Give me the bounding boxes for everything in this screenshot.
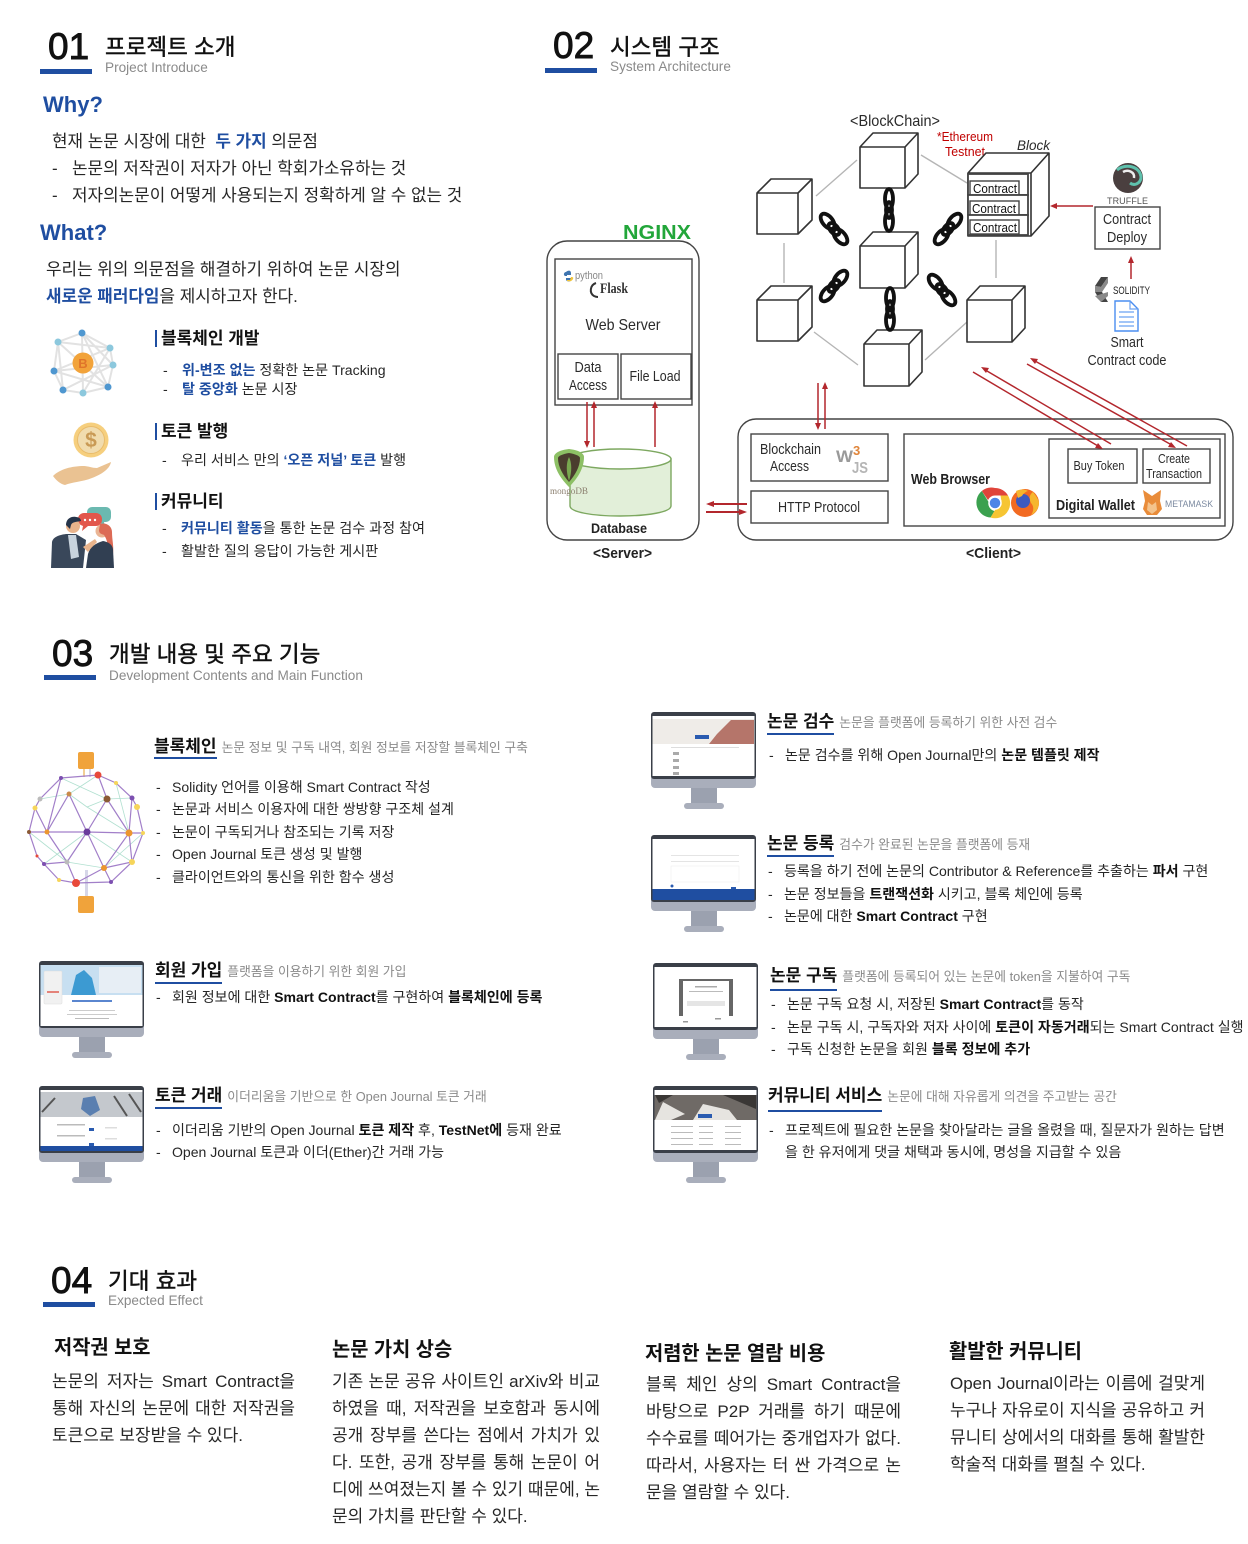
chart: system architecture diagram (546, 113, 1234, 562)
list: blockchain: Solidity 언어를 이용해 Smart Contract 작성 (172, 778, 431, 794)
digital wallet box: Create (1158, 452, 1190, 466)
heading: paper value increase: 논문 가치 상승 (332, 1338, 452, 1360)
text: low reading cost: 수수료를 떼어가는 중개업자가 없다. (646, 1428, 901, 1448)
digital wallet box: Transaction (1146, 467, 1202, 481)
text: low reading cost: 블록 체인 상의 Smart Contract을 (646, 1374, 901, 1394)
subheading: expected effect: Expected Effect (108, 1293, 203, 1308)
text: copyright protection (52, 1368, 295, 1448)
text: blockchain development points: 위-변조 없는 정확한 논문 Tracking (182, 362, 386, 378)
heading: blockchain (154, 737, 528, 759)
heading: paper review (767, 712, 1057, 735)
icon: coin in hand: $ (85, 429, 97, 452)
arrow: solidity to deploy (1128, 256, 1134, 279)
subheading: project introduce: Project Introduce (105, 60, 208, 75)
icon: blockchain network (50, 330, 116, 396)
list: blockchain: Open Journal 토큰 생성 및 발행 (172, 846, 362, 862)
list: blockchain (156, 778, 454, 884)
list: paper subscription: 논문 구독 요청 시, 저장된 Smart Contract를 동작 (787, 996, 1084, 1012)
database: mongoDB (550, 486, 588, 496)
list: paper review: - (769, 746, 774, 762)
label: smart contract code: Contract code (1088, 353, 1166, 369)
list: blockchain: 클라이언트와의 통신을 위한 함수 생성 (172, 868, 394, 884)
heading: expected effect: 기대 효과 (108, 1268, 197, 1294)
list: paper registration: - (768, 908, 773, 924)
list: token exchange: Open Journal 토큰과 이더(Ether)간 거래 가능 (172, 1144, 444, 1160)
blockchain access box: JS (852, 460, 868, 477)
heading: community service: 논문에 대해 자유롭게 의견을 주고받는 공간 (887, 1089, 1117, 1104)
heading: system architecture: 시스템 구조 (610, 34, 720, 60)
list: paper registration (768, 863, 1208, 924)
list: token exchange: - (156, 1122, 161, 1138)
text: active community: Open Journal이라는 이름에 걸맞게 (950, 1374, 1205, 1392)
list: blockchain: 논문이 구독되거나 참조되는 기록 저장 (172, 824, 394, 840)
list: blockchain: - (156, 824, 161, 840)
label: smart contract code (1088, 335, 1166, 369)
subheading: system architecture: System Architecture (610, 59, 731, 74)
sub-heading: blockchain development: 블록체인 개발 (161, 329, 260, 348)
heading: token exchange: 토큰 거래 (155, 1086, 222, 1105)
text: blockchain development points (163, 362, 386, 396)
text: paper value increase (332, 1368, 600, 1530)
list: community service: - (769, 1122, 774, 1138)
web server box: Access (569, 378, 607, 394)
text: low reading cost: 바탕으로 P2P 거래를 하기 때문에 (646, 1402, 901, 1420)
list: token exchange: - (156, 1144, 161, 1160)
label: client: <Client> (966, 545, 1021, 562)
list: paper subscription (771, 996, 1244, 1057)
text: active community: 학술적 대화를 펼칠 수 있다. (950, 1454, 1146, 1474)
icon: blockchain network: B (78, 356, 88, 371)
column: paper value increase (332, 1338, 600, 1532)
icon: truffle: TRUFFLE (1107, 196, 1148, 206)
text: paper value increase: 디에 쓰여졌는지 볼 수 있기 때문에, 논 (332, 1480, 600, 1498)
arrows: transaction and blockchain (1027, 358, 1187, 448)
list: blockchain: - (156, 778, 161, 794)
heading: member signup: 플랫폼을 이용하기 위한 회원 가입 (227, 964, 406, 978)
text: active community: 누구나 자유로이 지식을 공유하고 커 (950, 1400, 1205, 1420)
text: active community (950, 1370, 1205, 1478)
blockchain access box: Blockchain (760, 442, 821, 458)
heading: token exchange (155, 1086, 487, 1109)
icon: solidity: SOLIDITY (1113, 285, 1150, 297)
section number 04: 04 (51, 1260, 92, 1301)
list: community service: 을 한 유저에게 댓글 채택과 동시에, 명성을 지급할 수 있음 (785, 1144, 1121, 1160)
section number 03: 03 (52, 633, 93, 674)
list: paper registration: 논문 정보들을 트랜잭션화 시키고, 블록 체인에 등록 (784, 886, 1083, 902)
web server box: python (575, 270, 603, 282)
section bar 01 (40, 69, 92, 74)
list: paper registration: 등록을 하기 전에 논문의 Contributor & Reference를 추출하는 파서 구현 (784, 863, 1208, 879)
icon: coin in hand (53, 422, 111, 485)
text: blockchain development points: 탈 중앙화 논문 시장 (182, 380, 297, 396)
text: community points: 활발한 질의 응답이 가능한 게시판 (181, 543, 378, 559)
text: what paragraph (46, 260, 400, 306)
arrows: web server and database (584, 401, 658, 448)
text: copyright protection: 논문의 저자는 Smart Contract을 (52, 1372, 295, 1390)
blockchain network: Block (1017, 137, 1051, 153)
arrows: buy token and blockchain (973, 367, 1111, 449)
http protocol box: HTTP Protocol (778, 500, 860, 516)
text: active community: 뮤니티 상에서의 대화를 통해 활발한 (950, 1428, 1205, 1446)
list: paper registration: 논문에 대한 Smart Contract 구현 (784, 908, 988, 924)
list: member signup: 회원 정보에 대한 Smart Contract를 구현하여 블록체인에 등록 (172, 988, 542, 1004)
sub-heading: community: 커뮤니티 (161, 492, 224, 511)
web server box: Data (574, 360, 602, 376)
digital wallet box: Buy Token (1074, 459, 1125, 473)
list: paper subscription: 구독 신청한 논문을 회원 블록 정보에 추가 (787, 1041, 1030, 1057)
icon: solidity (1095, 277, 1150, 302)
heading: blockchain: 논문 정보 및 구독 내역, 회원 정보를 저장할 블록체인 구축 (222, 740, 528, 755)
text: low reading cost: 문을 열람할 수 있다. (646, 1482, 790, 1502)
panel: 04 expected effect (0, 1260, 1248, 1540)
text: why point 1: 논문의 저작권이 저자가 아닌 학회가소유하는 것 (72, 159, 406, 178)
heading: paper review: 논문을 플랫폼에 등록하기 위한 사전 검수 (839, 715, 1057, 730)
text: blockchain development points: - (163, 362, 168, 378)
digital wallet box: Digital Wallet (1056, 498, 1135, 514)
panel: 02 system architecture (545, 25, 1234, 562)
monitor: signup screen (39, 961, 144, 1058)
list: paper subscription: 논문 구독 시, 구독자와 저자 사이에 토큰이 자동거래되는 Smart Contract 실행 (787, 1018, 1244, 1034)
block with contracts: Contract (973, 181, 1017, 196)
heading: community service: 커뮤니티 서비스 (768, 1086, 882, 1105)
text: community points: - (162, 543, 167, 559)
blockchain access box: Access (770, 459, 809, 475)
section bar 02 (545, 68, 597, 73)
sub-heading: token issuance: 토큰 발행 (161, 422, 228, 441)
illustration: blockchain globe (27, 752, 145, 913)
text: why point 2: 저자의논문이 어떻게 사용되는지 정확하게 알 수 없는 것 (72, 186, 462, 205)
panel: 01 project introduce (40, 26, 462, 568)
contract deploy box: Contract (1103, 212, 1151, 228)
feature: token exchange (39, 1086, 562, 1183)
heading: project introduce: 프로젝트 소개 (105, 34, 235, 60)
text: paper value increase: 문의 가치를 판단할 수 있다. (332, 1506, 528, 1526)
heading: what: What? (40, 220, 107, 245)
monitor: token exchange screen (39, 1086, 144, 1183)
heading: paper review: 논문 검수 (767, 712, 834, 731)
heading: paper registration: 논문 등록 (767, 834, 834, 852)
list: token exchange: 이더리움 기반의 Open Journal 토큰 제작 후, TestNet에 등재 완료 (172, 1122, 562, 1138)
list: community service: 프로젝트에 필요한 논문을 찾아달라는 글을 올렸을 때, 질문자가 원하는 답변 (785, 1122, 1225, 1138)
text: low reading cost: 따라서, 사용자는 터 싼 가격으로 논 (646, 1456, 901, 1474)
blockchain access box: W (836, 447, 854, 466)
heading: copyright protection: 저작권 보호 (54, 1337, 150, 1359)
section bar 03 (44, 675, 96, 680)
monitor: paper subscription screen (653, 963, 758, 1060)
heading: paper registration: 검수가 완료된 논문을 플랫폼에 등재 (839, 836, 1030, 852)
web server box: File Load (630, 369, 680, 385)
icon: firefox (1011, 489, 1039, 517)
text: community points: - (162, 520, 167, 536)
list: paper subscription: - (771, 1018, 776, 1034)
icon: document (1115, 301, 1138, 331)
digital wallet box (1049, 439, 1220, 518)
heading: community service (768, 1085, 1117, 1112)
text: community points: 커뮤니티 활동을 통한 논문 검수 과정 참여 (181, 520, 425, 536)
icon: people talking (51, 507, 114, 568)
heading: paper subscription: 플랫폼에 등록되어 있는 논문에 token을 지불하여 구독 (842, 969, 1130, 984)
section bar 04 (43, 1302, 95, 1307)
feature: paper registration (651, 834, 1208, 932)
heading: low reading cost: 저렴한 논문 열람 비용 (645, 1342, 825, 1364)
icon: truffle (1107, 163, 1148, 206)
column: copyright protection (52, 1336, 296, 1451)
blockchain access box: 3 (853, 443, 860, 458)
text: what paragraph: 새로운 패러다임을 제시하고자 한다. (46, 287, 298, 306)
list: blockchain: 논문과 서비스 이용자에 대한 쌍방향 구조체 설계 (172, 801, 454, 817)
label: server: <Server> (593, 545, 652, 562)
column: low reading cost (645, 1342, 902, 1506)
list: member signup: - (156, 988, 161, 1004)
web server box (555, 259, 692, 405)
blockchain network: Testnet (945, 145, 986, 159)
list: community service (769, 1118, 1225, 1164)
list: paper registration: - (768, 863, 773, 879)
section number 02: 02 (553, 25, 594, 66)
heading: member signup (155, 960, 406, 984)
digital wallet box: METAMASK (1165, 499, 1214, 510)
web browser box: Web Browser (911, 472, 990, 488)
database: Database (591, 520, 647, 536)
heading: active community: 활발한 커뮤니티 (949, 1340, 1082, 1362)
text: copyright protection: 통해 자신의 논문에 대한 저작권을 (52, 1398, 295, 1418)
feature: blockchain (27, 737, 528, 913)
text: token issuance point: - (162, 452, 167, 468)
web browser box (904, 434, 1225, 526)
text: paper value increase: 하였을 때, 저작권을 보호함과 동시에 (332, 1398, 600, 1418)
monitor: paper registration screen (651, 835, 756, 932)
blockchain access box (751, 434, 888, 481)
list: blockchain: - (156, 868, 161, 884)
text: why point 2: - (52, 186, 58, 205)
text: paper value increase: 공개 장부를 쓴다는 점에서 가치가 있 (332, 1426, 600, 1444)
column: active community (949, 1340, 1206, 1480)
heading: paper subscription: 논문 구독 (770, 966, 837, 985)
list: paper review: 논문 검수를 위해 Open Journal만의 논문 템플릿 제작 (785, 746, 1100, 762)
list: blockchain: - (156, 801, 161, 817)
heading: why: Why? (43, 92, 103, 117)
server container: NGINX (623, 222, 692, 244)
web server box: Web Server (586, 317, 661, 334)
contract deploy box: Deploy (1107, 230, 1148, 246)
heading: token exchange: 이더리움을 기반으로 한 Open Journal 토큰 거래 (227, 1089, 487, 1104)
heading: member signup: 회원 가입 (155, 960, 222, 980)
text: what paragraph: 우리는 위의 의문점을 해결하기 위하여 논문 시장의 (46, 260, 400, 279)
text: why point 1: - (52, 159, 58, 178)
panel: 03 development contents and main function (27, 633, 1244, 1183)
block with contracts: Contract (973, 220, 1017, 235)
text: blockchain development points: - (163, 380, 168, 396)
monitor: community screen (653, 1086, 758, 1183)
label: smart contract code: Smart (1110, 335, 1144, 351)
blockchain network (757, 113, 1051, 386)
feature: paper subscription (653, 963, 1244, 1060)
heading: blockchain: 블록체인 (154, 737, 217, 756)
monitor: paper review screen (651, 712, 756, 809)
icon: chrome (976, 488, 1010, 518)
text: why intro: 현재 논문 시장에 대한 두 가지 의문점 (52, 132, 318, 151)
feature: paper review (651, 712, 1100, 809)
heading: paper registration (767, 834, 1030, 857)
database (550, 449, 671, 536)
section number 01: 01 (48, 26, 89, 67)
text: community points (162, 520, 425, 559)
http protocol box (751, 491, 888, 523)
block with contracts (968, 153, 1049, 236)
arrows: blockchain and client (815, 382, 828, 430)
list: paper subscription: - (771, 996, 776, 1012)
server container (547, 222, 699, 540)
blockchain network: <BlockChain> (850, 113, 940, 130)
heading: development contents: 개발 내용 및 주요 기능 (109, 642, 320, 666)
text: token issuance point: 우리 서비스 만의 ‘오픈 저널’ 토큰 발행 (181, 452, 406, 468)
text: copyright protection: 토큰으로 보장받을 수 있다. (52, 1426, 243, 1444)
contract deploy box (1095, 207, 1160, 249)
arrows: server and client (706, 501, 747, 515)
feature: member signup (39, 960, 542, 1058)
block with contracts: Contract (972, 201, 1016, 216)
arrow: deploy to block (1050, 203, 1093, 209)
list: paper subscription: - (771, 1041, 776, 1057)
list: paper registration: - (768, 886, 773, 902)
heading: paper subscription (770, 966, 1130, 991)
blockchain network: *Ethereum (937, 130, 993, 144)
subheading: development contents: Development Contents and Main Function (109, 668, 363, 683)
text: low reading cost (646, 1370, 901, 1506)
text: paper value increase: 기존 논문 공유 사이트인 arXiv와 비교 (332, 1372, 600, 1390)
feature: community service (653, 1086, 1225, 1183)
text: paper value increase: 다. 또한, 공개 장부를 통해 논문이 어 (332, 1452, 600, 1472)
client container (738, 419, 1233, 540)
list: blockchain: - (156, 846, 161, 862)
web server box: Flask (600, 281, 629, 297)
list: token exchange (156, 1122, 562, 1160)
